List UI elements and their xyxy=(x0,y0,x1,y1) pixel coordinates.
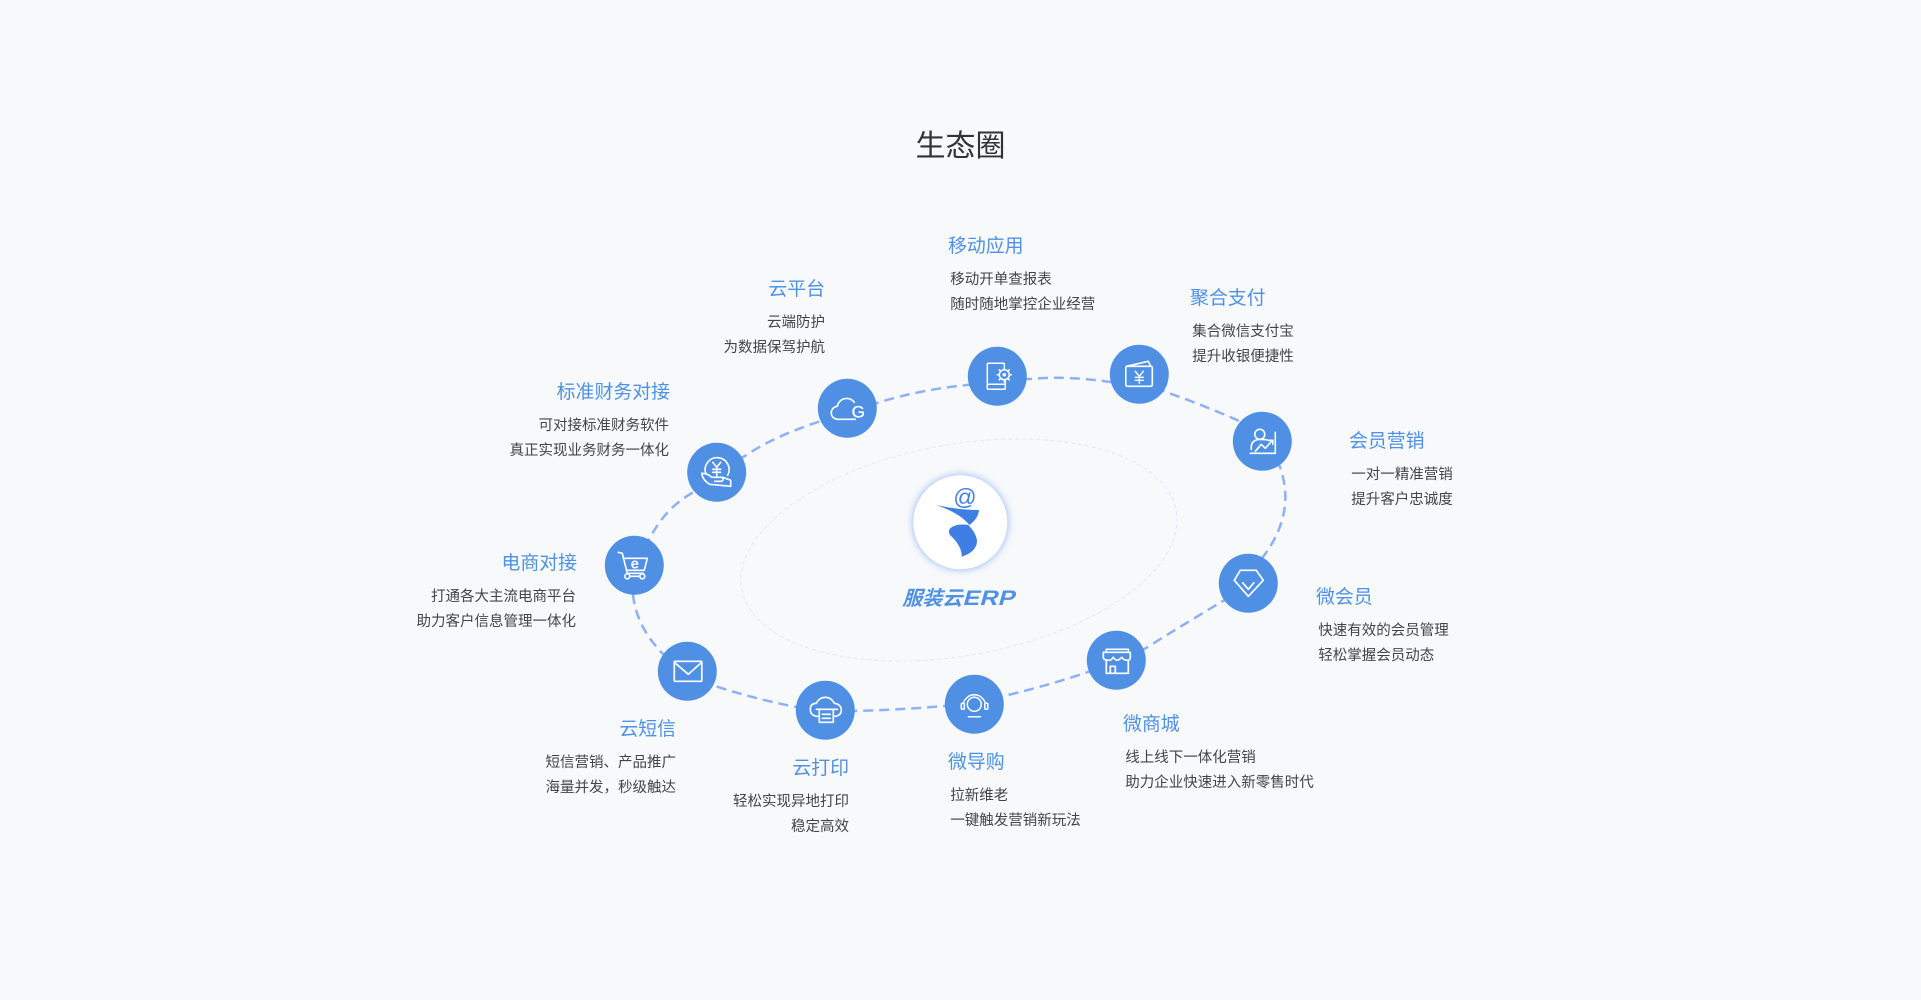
node: 电商对接 icon: e xyxy=(631,555,639,572)
node: 标准财务对接 icon xyxy=(687,443,746,502)
label: 聚合支付: 集合微信支付宝 xyxy=(1192,324,1294,340)
node: 电商对接 icon xyxy=(605,536,664,595)
label: 移动应用: 移动开单查报表 xyxy=(950,272,1052,288)
label: 云短信: 短信营销、产品推广 xyxy=(546,755,676,771)
inner dotted ellipse xyxy=(723,407,1195,693)
label: 会员营销: 一对一精准营销 xyxy=(1351,467,1453,483)
label: 移动应用 xyxy=(948,236,1095,312)
node: 微商城 icon xyxy=(1087,631,1146,690)
node: 云打印 icon xyxy=(796,681,855,740)
label: 云短信 xyxy=(546,719,676,796)
label: 云短信: 海量并发，秒级触达 xyxy=(546,780,676,796)
label: 聚合支付 xyxy=(1190,288,1294,364)
label: 微商城: 助力企业快速进入新零售时代 xyxy=(1125,774,1314,790)
label: 云平台: 云端防护 xyxy=(767,315,825,331)
label: 电商对接: 电商对接 xyxy=(501,553,577,574)
label: 标准财务对接: 标准财务对接 xyxy=(557,382,670,403)
label: 微商城: 线上线下一体化营销 xyxy=(1125,750,1256,766)
label: 云短信: 云短信 xyxy=(619,719,676,740)
node: 会员营销 icon xyxy=(1233,412,1292,471)
label: 微会员 xyxy=(1316,587,1449,664)
label: 云打印 xyxy=(733,758,849,834)
label: 电商对接 xyxy=(416,553,577,630)
node: 移动应用 icon xyxy=(968,347,1027,406)
label: 移动应用: 随时随地掌控企业经营 xyxy=(950,296,1095,312)
center logo badge xyxy=(912,474,1008,570)
label: 标准财务对接: 真正实现业务财务一体化 xyxy=(510,442,669,458)
outer dashed ring xyxy=(632,378,1285,711)
node: 微会员 icon xyxy=(1219,554,1278,613)
logo wordmark: ERP xyxy=(961,587,1019,610)
label: 微会员: 轻松掌握会员动态 xyxy=(1318,648,1434,664)
label: 标准财务对接: 可对接标准财务软件 xyxy=(538,418,669,434)
label: 电商对接: 助力客户信息管理一体化 xyxy=(416,614,576,630)
label: 云平台: 云平台 xyxy=(768,279,825,300)
label: 微导购: 一键触发营销新玩法 xyxy=(950,812,1081,828)
label: 微导购: 微导购 xyxy=(948,752,1005,773)
label: 聚合支付: 聚合支付 xyxy=(1190,288,1266,309)
label: 微导购 xyxy=(948,752,1081,828)
label: 微商城 xyxy=(1123,714,1314,790)
label: 会员营销: 提升客户忠诚度 xyxy=(1351,492,1453,508)
node: 云平台 icon xyxy=(818,379,877,438)
label: 微会员: 快速有效的会员管理 xyxy=(1318,623,1449,639)
label: 电商对接: 打通各大主流电商平台 xyxy=(431,589,576,605)
node: 云平台 icon: G xyxy=(852,402,865,421)
label: 云打印: 云打印 xyxy=(792,758,849,779)
label: 云打印: 轻松实现异地打印 xyxy=(733,794,849,810)
node: 云短信 icon xyxy=(658,642,717,701)
label: 移动应用: 移动应用 xyxy=(948,236,1024,257)
logo wordmark xyxy=(901,587,1019,610)
title: 生态圈 xyxy=(916,130,1006,163)
logo wordmark: 服装云 xyxy=(901,588,967,610)
label: 云平台: 为数据保驾护航 xyxy=(724,340,825,356)
label: 云平台 xyxy=(724,279,825,356)
label: 微导购: 拉新维老 xyxy=(950,788,1008,804)
label: 聚合支付: 提升收银便捷性 xyxy=(1192,348,1294,364)
center logo badge: @ xyxy=(953,484,976,510)
label: 微会员: 微会员 xyxy=(1316,587,1373,608)
node: 聚合支付 icon xyxy=(1110,345,1169,404)
label: 会员营销: 会员营销 xyxy=(1349,431,1425,452)
label: 微商城: 微商城 xyxy=(1123,714,1180,735)
label: 标准财务对接 xyxy=(510,382,670,458)
label: 云打印: 稳定高效 xyxy=(791,818,849,834)
label: 会员营销 xyxy=(1349,431,1453,508)
node: 微导购 icon xyxy=(945,675,1004,734)
